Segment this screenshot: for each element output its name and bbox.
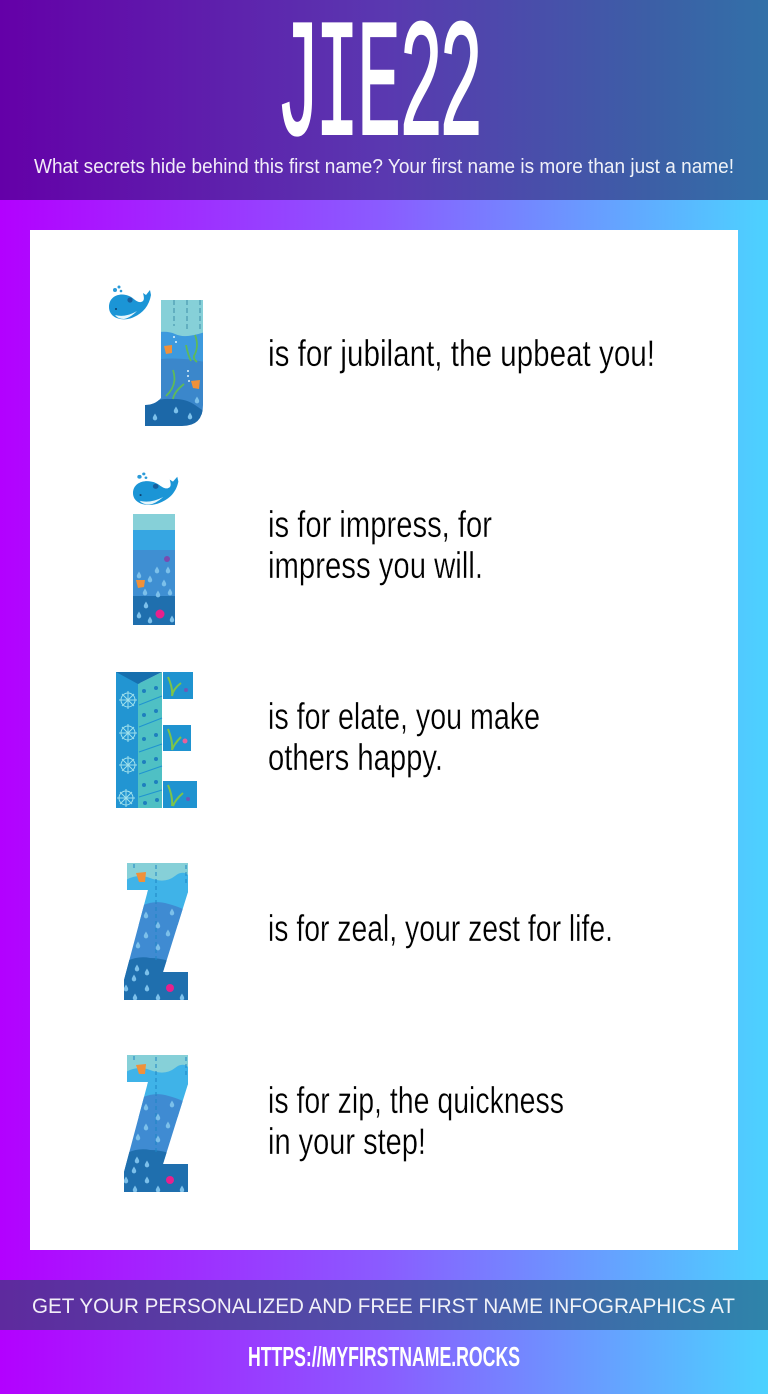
text: J line: is for jubilant, the upbeat you!: [268, 333, 655, 374]
icon: second letter Z: [124, 1055, 188, 1192]
text: I lines: is for impress, for: [268, 504, 492, 545]
footer call to action: GET YOUR PERSONALIZED AND FREE FIRST NAME INFOGRAPHICS AT: [32, 1295, 735, 1318]
text: E lines: is for elate, you make: [268, 696, 540, 737]
header band: [0, 0, 768, 200]
icon: whale: [109, 286, 151, 319]
subtitle: What secrets hide behind this first name? Your first name is more than just a name!: [34, 156, 734, 178]
text: E lines: others happy.: [268, 737, 443, 778]
footer band: [0, 1280, 768, 1330]
footer URL: HTTPS://MYFIRSTNAME.ROCKS: [248, 1341, 520, 1372]
text: E lines: [268, 696, 540, 778]
icon: whale: [133, 472, 178, 505]
icon: letter Z: [124, 863, 188, 1000]
text: second Z lines: [268, 1080, 564, 1162]
icon: letter I with whale: [133, 472, 178, 625]
main white panel: [30, 230, 738, 1250]
text: second Z lines: is for zip, the quickness: [268, 1080, 564, 1121]
icon: letter E: [116, 672, 197, 808]
text: I lines: [268, 504, 492, 586]
text: second Z lines: in your step!: [268, 1121, 426, 1162]
text: I lines: impress you will.: [268, 545, 483, 586]
icon: letter J with whale: [109, 286, 205, 426]
title: [276, 0, 483, 184]
text: Z line: is for zeal, your zest for life.: [268, 908, 613, 949]
